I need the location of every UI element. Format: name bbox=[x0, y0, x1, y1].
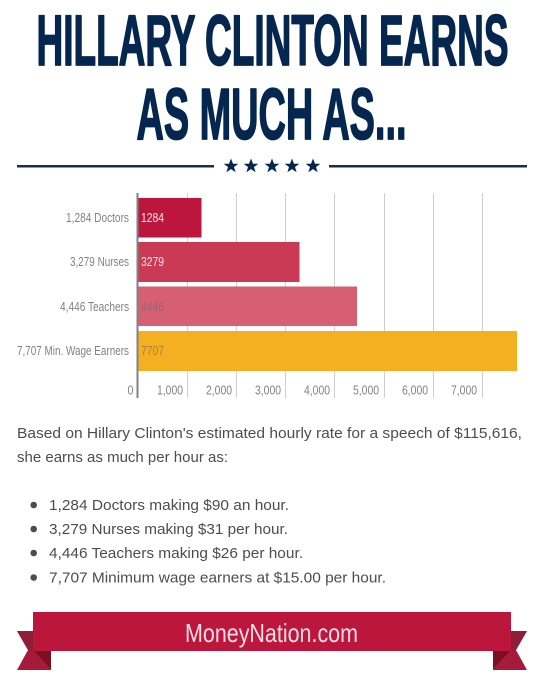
value axis labels: 5,000 bbox=[353, 384, 379, 398]
category labels: 1,284 Doctors bbox=[66, 211, 129, 225]
category labels: 7,707 Min. Wage Earners bbox=[17, 344, 129, 358]
value axis labels: 7,000 bbox=[451, 384, 477, 398]
chart axis bbox=[136, 193, 138, 398]
ribbon text: MoneyNation.com bbox=[185, 618, 358, 648]
category labels bbox=[17, 211, 129, 358]
intro text: she earns as much per hour as: bbox=[17, 449, 228, 466]
bar: minimum wage earners bbox=[138, 331, 517, 371]
bar value labels: 4446 bbox=[141, 300, 164, 314]
category labels: 3,279 Nurses bbox=[70, 255, 129, 269]
bar value labels: 7707 bbox=[141, 344, 164, 358]
bar value labels bbox=[141, 211, 164, 358]
bar: nurses bbox=[138, 242, 300, 282]
value axis labels bbox=[128, 384, 477, 398]
bar: doctors bbox=[138, 198, 202, 238]
bullet list: 1,284 Doctors making $90 an hour. bbox=[49, 497, 289, 514]
value axis labels: 1,000 bbox=[157, 384, 183, 398]
value axis labels: 6,000 bbox=[402, 384, 428, 398]
bullet list: 7,707 Minimum wage earners at $15.00 per hour. bbox=[49, 570, 386, 586]
bar: teachers bbox=[138, 286, 357, 326]
ribbon banner bbox=[17, 612, 527, 670]
divider with stars bbox=[17, 158, 527, 172]
value axis labels: 0 bbox=[128, 384, 134, 398]
value axis labels: 4,000 bbox=[304, 384, 330, 398]
title bbox=[36, 2, 508, 155]
bar value labels: 1284 bbox=[141, 211, 164, 225]
value axis labels: 3,000 bbox=[255, 384, 281, 398]
intro text bbox=[17, 425, 522, 466]
bullet list: 3,279 Nurses making $31 per hour. bbox=[49, 521, 288, 538]
value axis labels: 2,000 bbox=[206, 384, 232, 398]
category labels: 4,446 Teachers bbox=[60, 300, 129, 314]
bar chart bbox=[17, 193, 517, 398]
bar value labels: 3279 bbox=[141, 255, 164, 269]
bullet list bbox=[30, 497, 386, 586]
bullet list: 4,446 Teachers making $26 per hour. bbox=[49, 545, 303, 562]
intro text: Based on Hillary Clinton's estimated hourly rate for a speech of $115,616, bbox=[17, 425, 522, 442]
